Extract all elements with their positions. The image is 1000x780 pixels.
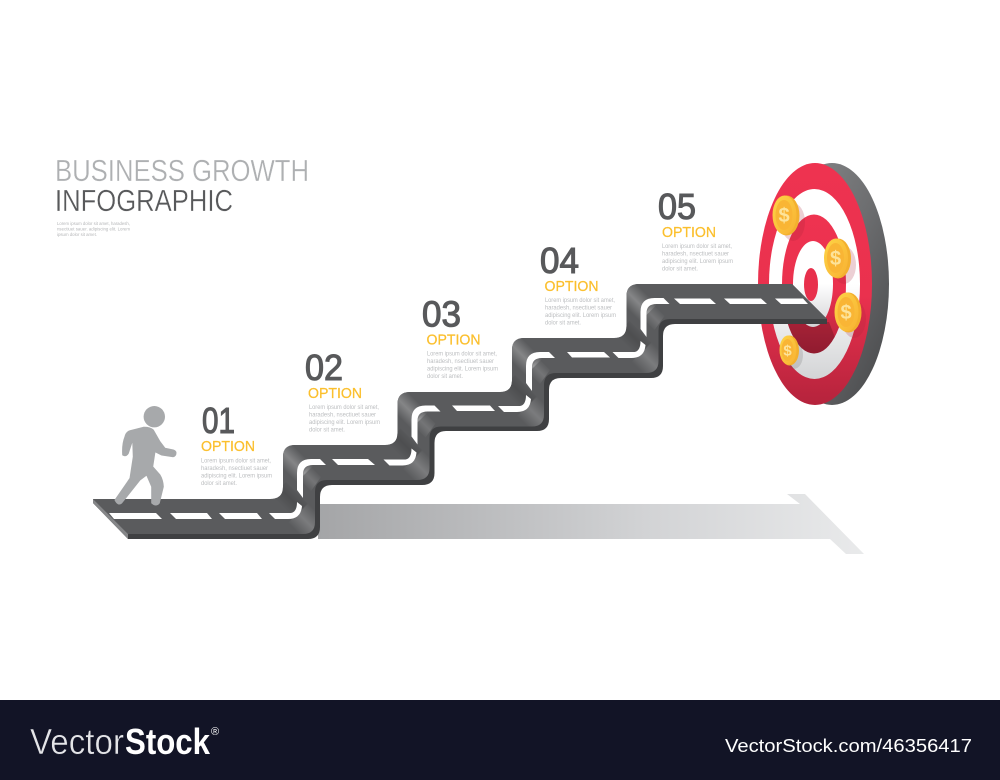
- title description: ipsum dolor sit amet.: [57, 232, 97, 237]
- step 01 text: dolor sit amet.: [201, 480, 237, 487]
- step 05 text: haradesh, nsectiuet sauer: [662, 250, 730, 258]
- step 03 text: adipiscing elit. Lorem ipsum: [427, 366, 498, 372]
- step 05: [658, 186, 733, 272]
- step 04 text: dolor sit amet.: [545, 320, 581, 326]
- step 05 text: adipiscing elit. Lorem ipsum: [662, 258, 733, 265]
- footer logo: Stock: [125, 721, 211, 762]
- road left edge: [93, 499, 128, 539]
- step 03 label: OPTION: [426, 332, 480, 348]
- step 05 number: 05: [658, 186, 696, 227]
- title: [55, 153, 309, 237]
- title description: nsectiuet sauer. adipiscing elit. Lorem: [57, 226, 130, 232]
- coin 2: $: [830, 248, 841, 270]
- step 02 text: adipiscing elit. Lorem ipsum: [309, 419, 380, 426]
- road: [93, 280, 827, 543]
- step 01 number: 01: [202, 400, 235, 441]
- coin 1: $: [778, 205, 790, 227]
- road shadow on target: [788, 322, 835, 354]
- step 03 number: 03: [422, 294, 461, 334]
- step 03 text: [427, 350, 498, 380]
- step 04 text: haradesh, nsectiuet sauer: [545, 304, 613, 312]
- icon: walking person: [115, 406, 176, 505]
- target white ring: [769, 189, 860, 379]
- step 05 text: Lorem ipsum dolor sit amet,: [662, 243, 732, 250]
- step 03 text: dolor sit amet.: [427, 373, 463, 380]
- step 04 text: adipiscing elit. Lorem ipsum: [545, 312, 616, 319]
- step 05 text: [662, 243, 733, 272]
- step 05 label: OPTION: [662, 225, 716, 241]
- road centre dashes: [109, 298, 808, 519]
- step 01 text: Lorem ipsum dolor sit amet,: [201, 458, 271, 464]
- riser shading 3: [510, 339, 548, 426]
- road surface: [93, 284, 827, 534]
- step 04 number: 04: [540, 240, 579, 281]
- step 03 text: haradesh, nsectiuet sauer: [427, 358, 495, 365]
- step 02 label: OPTION: [308, 386, 362, 402]
- coin 1: [772, 196, 805, 241]
- target inner white ring: [793, 241, 833, 327]
- step 02 text: dolor sit amet.: [309, 426, 345, 434]
- step 04: [540, 240, 616, 326]
- road fold shading: [270, 280, 672, 543]
- step 02 text: [309, 404, 380, 434]
- step 01 text: haradesh, nsectiuet sauer: [201, 465, 269, 472]
- road underside: [93, 284, 827, 539]
- title description: [57, 221, 130, 237]
- step 01 label: OPTION: [201, 439, 255, 455]
- coin 3: $: [840, 302, 852, 324]
- step 01: [201, 400, 272, 487]
- arrow shadow on ground: [318, 494, 864, 554]
- target inner red ring: [782, 214, 846, 354]
- step 02 text: haradesh, nsectiuet sauer: [309, 412, 377, 418]
- coin 3: [834, 292, 866, 338]
- step 04 text: [545, 297, 616, 326]
- step 02 text: Lorem ipsum dolor sit amet,: [309, 404, 379, 411]
- target bullseye: [804, 268, 818, 301]
- riser shading 4: [625, 285, 663, 372]
- footer logo: [30, 721, 219, 762]
- step 01 text: [201, 458, 272, 487]
- step 04 text: Lorem ipsum dolor sit amet,: [545, 297, 615, 304]
- step 04 label: OPTION: [544, 279, 598, 295]
- coin 4: $: [783, 342, 792, 360]
- target side rim: [775, 163, 889, 405]
- coin 4: [780, 336, 803, 369]
- footer logo: ®: [211, 726, 219, 738]
- riser shading 1: [282, 446, 320, 534]
- step 02 number: 02: [305, 347, 343, 388]
- step 03 text: Lorem ipsum dolor sit amet,: [427, 350, 497, 358]
- target board: [758, 163, 889, 405]
- step 03: [422, 294, 498, 380]
- footer id: VectorStock.com/46356417: [725, 736, 972, 756]
- target outer red ring: [758, 163, 872, 405]
- title description: Lorem ipsum dolor sit amet, haradesh,: [57, 221, 130, 226]
- footer bar: [0, 700, 1000, 780]
- heading: infographic: INFOGRAPHIC: [55, 183, 233, 218]
- step 05 text: dolor sit amet.: [662, 266, 698, 272]
- riser shading 2: [396, 393, 434, 480]
- coin 2: [824, 238, 856, 284]
- footer logo: Vector: [30, 721, 124, 762]
- step 02: [305, 347, 380, 434]
- step 01 text: adipiscing elit. Lorem ipsum: [201, 472, 272, 480]
- heading: business growth: BUSINESS GROWTH: [55, 153, 309, 188]
